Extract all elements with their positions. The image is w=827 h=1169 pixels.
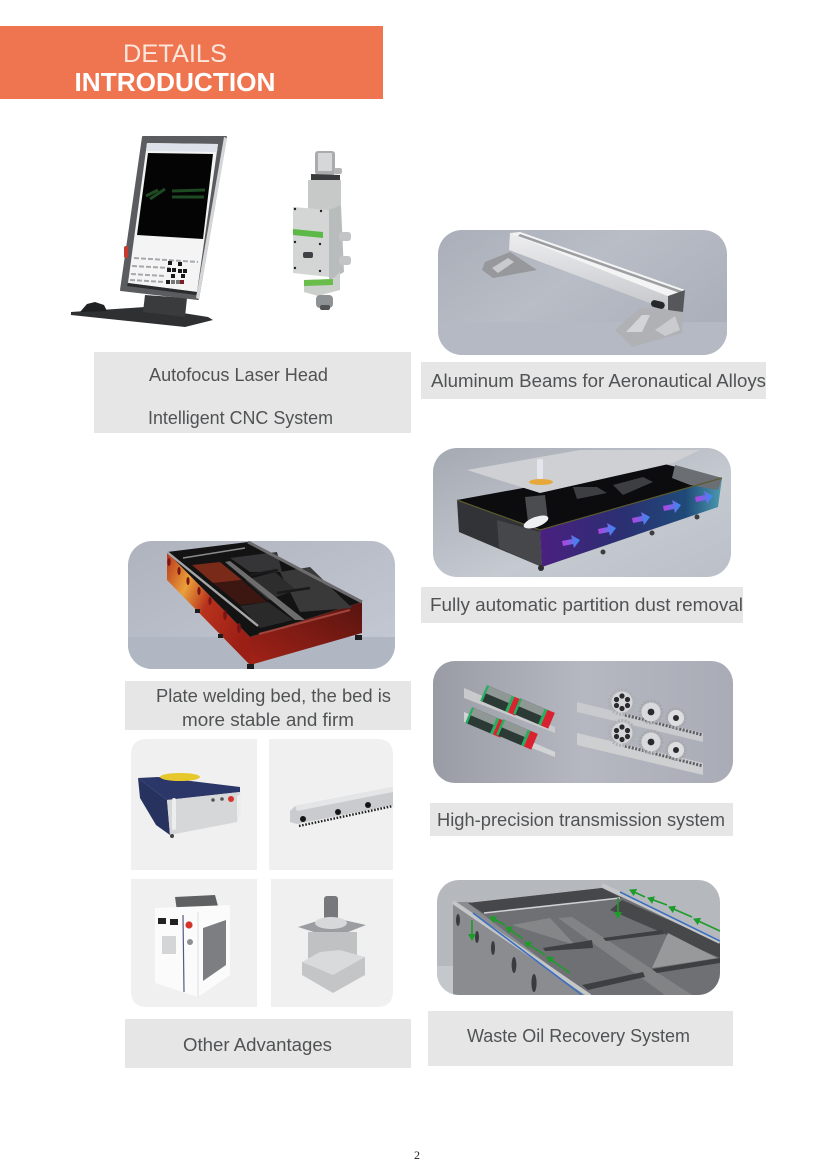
caption: plate welding bed [125,681,411,730]
image: waste oil recovery [437,880,720,996]
panel: water chiller [131,879,257,1007]
caption: plate welding bed: more stable and firm [182,709,354,730]
panel: fiber laser source [131,739,257,870]
image: CNC control monitor [71,137,227,327]
caption: waste oil recovery [428,1011,733,1066]
caption: aluminum beams [421,362,766,399]
caption: plate welding bed: Plate welding bed, the bed is [156,685,391,706]
panel: planetary reducer [271,879,393,1007]
image: transmission system [433,661,733,783]
caption: laser head and CNC system: Autofocus Laser Head [149,364,328,385]
caption: other advantages: Other Advantages [183,1034,332,1055]
caption: waste oil recovery: Waste Oil Recovery System [467,1025,690,1046]
image: autofocus laser head [293,151,351,310]
caption: transmission system: High-precision transmission system [437,809,725,830]
caption: dust removal [421,587,743,623]
page number: 2 [414,1148,420,1162]
image: plate welding bed [128,541,395,669]
caption: dust removal: Fully automatic partition dust removal [430,594,743,615]
image: partition dust removal bed [433,448,731,577]
title banner [0,26,383,99]
caption: aluminum beams: Aluminum Beams for Aeronautical Alloys [431,370,766,391]
caption: transmission system [430,803,733,836]
title banner: DETAILS [123,40,227,68]
panel: gear rack [269,739,393,870]
caption: laser head and CNC system: Intelligent CNC System [148,407,333,428]
image: aluminum beam [438,230,727,355]
title banner: INTRODUCTION [74,67,276,97]
caption: other advantages [125,1019,411,1068]
caption: laser head and CNC system [94,352,411,433]
